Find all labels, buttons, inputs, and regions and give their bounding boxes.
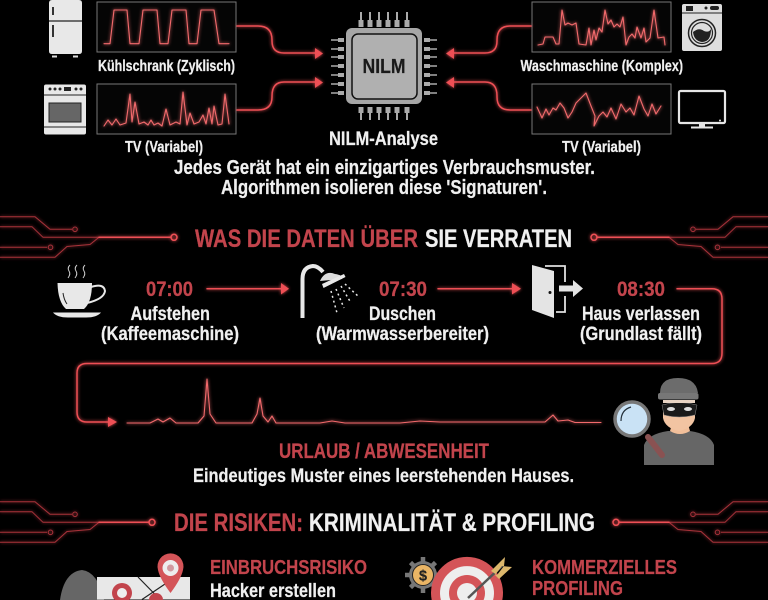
label: Waschmaschine: Waschmaschine (Komplex) [520,58,683,75]
icon: target with dart and gear: $ [419,568,428,584]
icon: washing machine [682,4,722,51]
icon: coffee cup [53,265,105,318]
signal box: washing machine [532,2,671,52]
signal box: TV right [532,84,671,134]
panel: commercial profiling [405,556,677,600]
heading: die Risiken [174,509,595,537]
text block: signature explanation [174,157,595,199]
label: TV right: TV (Variabel) [562,139,641,156]
panel: daily timeline [53,265,722,487]
arrow: fridge to chip [237,26,323,59]
label: TV left: TV (Variabel) [125,139,203,156]
heading: die Risiken: DIE RISIKEN: [174,509,303,537]
text: Aufstehen: (Kaffeemaschine) [101,324,239,345]
text: Duschen: (Warmwasserbereiter) [316,324,489,345]
panel: burglary risk [60,553,367,600]
chart: flat consumption trace [127,379,601,423]
icon: burglar with magnifier [615,378,714,465]
text: Urlaub Abwesenheit: URLAUB / ABWESENHEIT [279,440,489,463]
icon: fridge [49,0,82,58]
text: Haus verlassen: (Grundlast fällt) [580,324,702,345]
arrow: oven to chip [237,77,323,110]
circuit lines: section 2 left [0,502,155,542]
heading: die Risiken: KRIMINALITÄT & PROFILING [309,509,595,537]
heading: was die Daten verraten: WAS DIE DATEN ÜBER [195,224,418,253]
heading: was die Daten verraten: SIE VERRATEN [425,225,572,253]
arrow: 07:00 to shower [207,283,289,294]
signal box: fridge [97,2,236,52]
arrow: TV to chip [446,77,531,110]
icon: NILM chip [331,12,437,120]
arrow: washer to chip [446,26,531,59]
heading: kommerzielles Profiling: PROFILING [532,577,623,600]
icon: NILM chip: NILM [362,56,406,78]
heading: Einbruchsrisiko: EINBRUCHSRISIKO [210,556,367,579]
text: Duschen [316,304,489,345]
connector: neon line to trace [77,289,722,427]
time: 07:30: 07:30 [379,278,427,301]
icon: TV [679,91,725,128]
panel: NILM signatures [44,0,725,199]
circuit lines: section 1 left [0,217,177,257]
signal box: TV left [97,84,236,134]
text: Haus verlassen [580,304,702,345]
icon: oven [44,84,86,134]
label: Kühlschrank: Kühlschrank (Zyklisch) [98,58,235,75]
time: 07:00: 07:00 [146,278,193,301]
label: NILM-Analyse: NILM-Analyse [329,129,438,150]
time: 08:30: 08:30 [617,278,665,301]
icon: target with dart and gear [405,557,512,600]
icon: hacker with map [60,553,190,600]
text: leerstehendes Haus: Eindeutiges Muster eines leerstehenden Hauses. [193,466,574,487]
heading: kommerzielles Profiling [532,556,677,600]
text: Aufstehen: Aufstehen [130,304,210,325]
heading: kommerzielles Profiling: KOMMERZIELLES [532,556,677,579]
text block: signature explanation: Jedes Gerät hat ein einzigartiges Verbrauchsmuster. [174,157,595,179]
text: Duschen: Duschen [369,304,436,325]
arrow: 07:30 to door [438,283,521,294]
circuit lines: section 1 right [591,217,768,257]
text: Haus verlassen: Haus verlassen [582,304,700,325]
circuit lines: section 2 right [613,502,768,542]
text: Aufstehen [101,304,239,345]
icon: shower [302,266,359,318]
icon: door with exit arrow [532,265,583,318]
text block: signature explanation: Algorithmen isolieren diese 'Signaturen'. [221,177,547,199]
